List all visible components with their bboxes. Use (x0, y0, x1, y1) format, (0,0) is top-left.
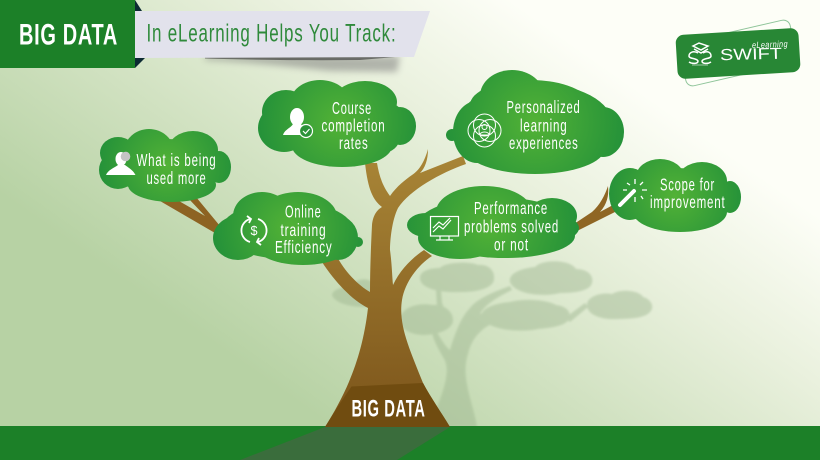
cloud shape (99, 129, 231, 202)
text: Efficiency (275, 237, 332, 257)
text: or not (494, 234, 529, 254)
cloud shape (213, 192, 363, 265)
logo tagline: eLearning (752, 39, 788, 50)
cloud: personalized learning experiences (446, 70, 624, 174)
header banner (0, 0, 430, 72)
cloud: what is being used more (99, 129, 231, 202)
right branch to scope cloud (574, 186, 615, 231)
subtitle ribbon (135, 11, 430, 58)
logo wordmark: SWIFT (720, 46, 782, 64)
text (464, 198, 559, 254)
text: Scope for (660, 174, 715, 194)
text: improvement (650, 192, 726, 212)
cloud shape (407, 186, 579, 259)
ground (0, 426, 820, 460)
logo mark (689, 43, 711, 65)
logo (675, 19, 801, 87)
trunk base band (325, 383, 450, 427)
icon: person with check (283, 108, 312, 138)
text (506, 97, 580, 153)
text (650, 174, 726, 212)
text: completion (322, 116, 386, 136)
cloud: performance problems solved or not (407, 186, 579, 259)
tree shadow (332, 261, 652, 427)
tree (160, 149, 615, 427)
text: Course (332, 98, 372, 118)
logo plate (675, 28, 801, 79)
text: experiences (509, 133, 578, 153)
cloud shape (446, 70, 624, 174)
text: What is being (136, 150, 216, 170)
logo outline (678, 19, 798, 87)
trunk shadow on ground (240, 427, 450, 460)
text: Online (285, 202, 322, 222)
trunk and main branches (322, 149, 466, 427)
text: problems solved (464, 216, 559, 236)
icon: person (106, 152, 136, 175)
icon: dollar cycle: $ (250, 223, 258, 238)
cloud shape (609, 159, 741, 232)
fold corners (135, 0, 145, 68)
text: Performance (474, 198, 548, 218)
text: Personalized (506, 97, 580, 117)
cloud: course completion rates (258, 80, 416, 167)
title: BIG DATA (19, 18, 118, 52)
banner shadow core (205, 57, 395, 60)
text (275, 202, 332, 257)
cloud: online training efficiency (213, 192, 363, 265)
branches to left clouds (160, 197, 220, 233)
text: used more (146, 168, 206, 188)
banner shadow (205, 56, 400, 72)
cloud shape (258, 80, 416, 167)
cloud: scope for improvement (609, 159, 741, 232)
text: rates (339, 133, 368, 153)
icon: dollar cycle (241, 216, 267, 245)
text: training (280, 220, 326, 240)
icon: magic wand (620, 179, 647, 205)
trunk label: BIG DATA (352, 396, 426, 422)
subtitle: In eLearning Helps You Track: (146, 20, 396, 48)
icon: overlapping circles with person (468, 114, 501, 147)
text (136, 150, 216, 188)
title block (0, 0, 135, 68)
icon: monitor with chart (430, 216, 458, 240)
text: learning (520, 116, 568, 136)
text (322, 98, 386, 153)
